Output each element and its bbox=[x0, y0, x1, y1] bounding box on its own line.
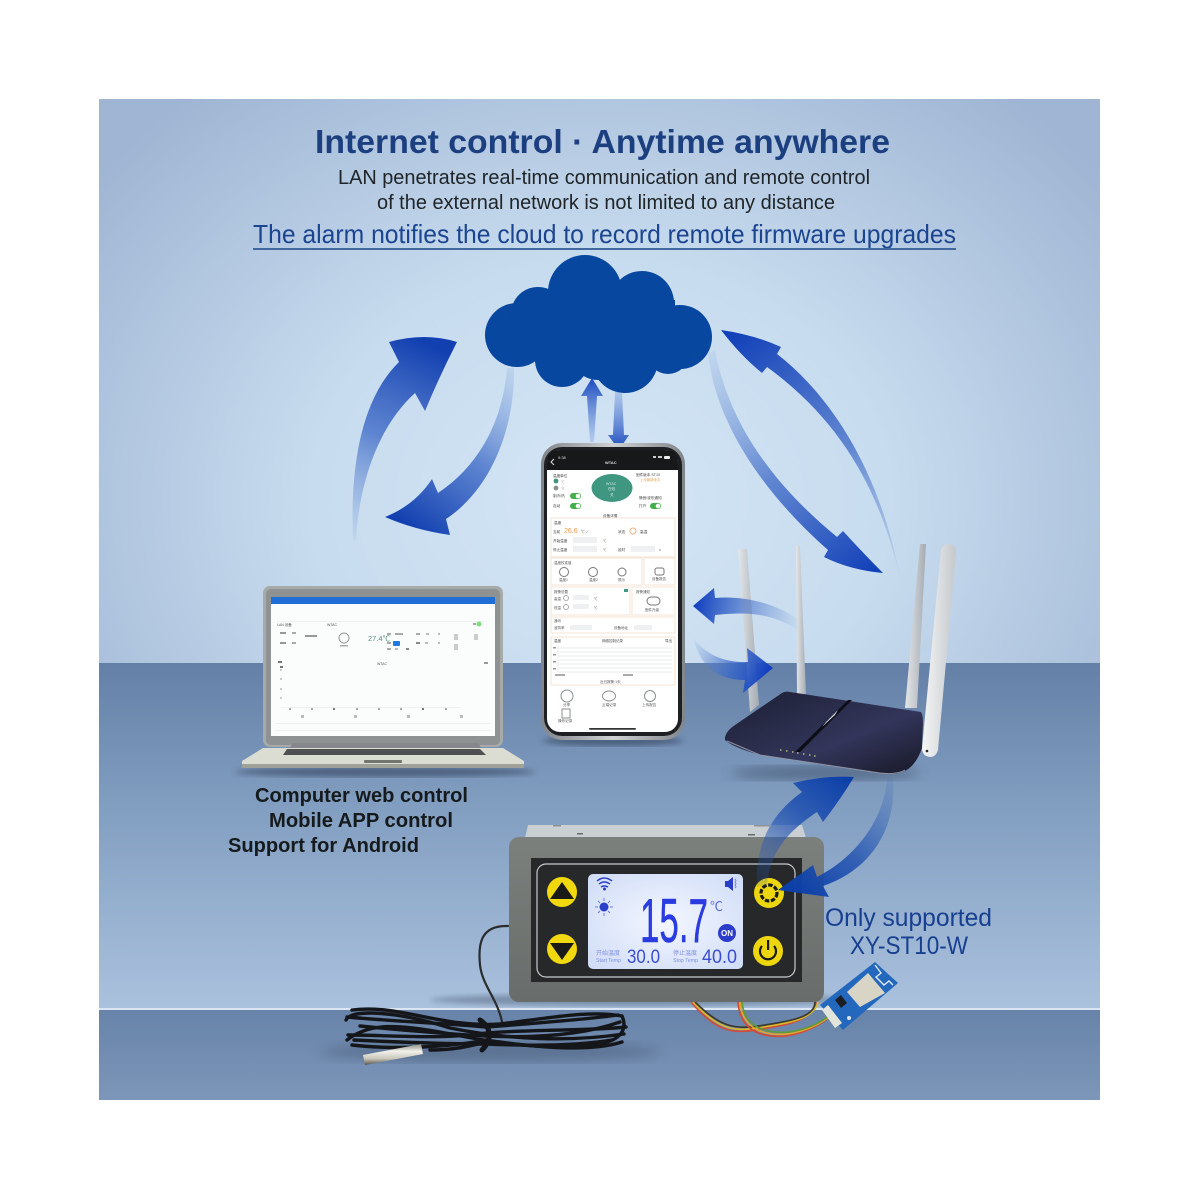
phone card details: ℃ bbox=[594, 597, 598, 601]
subtitle line 2: of the external network is not limited to any distance bbox=[377, 192, 835, 214]
router front edge and LEDs bbox=[727, 741, 905, 774]
arrow: cloud down to router bbox=[708, 350, 883, 573]
phone bottom actions bbox=[558, 690, 657, 730]
feature list text: Support for Android bbox=[228, 835, 419, 857]
feature list text: Mobile APP control bbox=[269, 810, 453, 832]
laptop screen content bbox=[275, 621, 491, 731]
phone temperature chart: 近日报警·1天 bbox=[600, 679, 621, 684]
phone temperature section: 温度 bbox=[554, 520, 562, 525]
phone temperature section: 开始温度 bbox=[553, 538, 568, 543]
phone temperature section bbox=[551, 518, 675, 557]
laptop screen content: LAN 设备 bbox=[277, 622, 292, 627]
phone device status: 在线 bbox=[608, 486, 616, 491]
phone device status: 自动 bbox=[553, 503, 561, 508]
phone temperature section: ℃ ✓ bbox=[581, 530, 589, 534]
icon: cloud bbox=[485, 255, 712, 393]
model note: XY-ST10-W bbox=[850, 932, 968, 960]
phone device status: 打开 bbox=[639, 503, 647, 508]
phone temperature chart: 导出 bbox=[665, 638, 672, 643]
phone temperature chart: 温度 bbox=[554, 638, 562, 643]
phone temperature section: ℃ bbox=[603, 548, 607, 552]
phone card details: 报警通知 bbox=[636, 589, 650, 594]
stop temp bbox=[673, 947, 737, 968]
phone device status: 静音/波形通知 bbox=[639, 495, 662, 500]
laptop base and keyboard bbox=[242, 743, 524, 768]
model note bbox=[825, 904, 992, 960]
phone device status: ℉ bbox=[561, 487, 565, 491]
phone temperature section: s bbox=[659, 548, 661, 552]
phone card details: 低温 bbox=[554, 605, 562, 610]
arrow: phone to router bbox=[693, 637, 773, 693]
phone device status: 上传最新版本 bbox=[640, 477, 661, 482]
router bbox=[725, 544, 956, 774]
phone card details: 设备地址 bbox=[614, 625, 628, 630]
laptop screen content: WTAC bbox=[377, 662, 388, 666]
degree unit: ℃ bbox=[710, 899, 723, 914]
wifi module board bbox=[820, 962, 898, 1030]
phone card details bbox=[554, 560, 666, 630]
phone card details: 固件升级 bbox=[645, 607, 659, 612]
phone device status bbox=[553, 472, 662, 518]
controller back housing bbox=[525, 825, 806, 838]
phone status bar: WTAC bbox=[605, 460, 617, 465]
router front antenna bbox=[922, 544, 956, 757]
phone frame bbox=[541, 443, 685, 740]
phone temperature section: 高温 bbox=[640, 529, 648, 534]
phone temperature section: 停止温度 bbox=[553, 547, 568, 552]
title: Internet control · Anytime anywhere bbox=[315, 123, 890, 160]
phone device status: 设备详情 bbox=[603, 513, 618, 518]
controller face panel bbox=[531, 858, 802, 982]
arrow: up to cloud from laptop bbox=[353, 337, 457, 540]
phone device status: 固件版本 ST10 bbox=[636, 472, 660, 477]
router center seam bbox=[795, 700, 852, 752]
phone temperature section: ℃ bbox=[603, 539, 607, 543]
laptop screen header bbox=[271, 597, 495, 604]
phone device status: 制冷/热 bbox=[553, 493, 565, 498]
start temp bbox=[596, 947, 660, 968]
temperature reading: 15.7 bbox=[640, 887, 708, 956]
phone device status: 关 bbox=[610, 492, 614, 497]
underlined feature line: The alarm notifies the cloud to record remote firmware upgrades bbox=[253, 219, 956, 249]
smartphone bbox=[541, 443, 685, 740]
phone temperature chart: 网络控制记录 bbox=[602, 638, 623, 643]
stop temp: Stop Temp bbox=[673, 958, 698, 964]
phone card details: 高温 bbox=[554, 596, 562, 601]
start temp: Start Temp bbox=[596, 958, 621, 964]
feature list text bbox=[228, 785, 468, 857]
ON badge: ON bbox=[721, 929, 733, 938]
temperature controller device bbox=[509, 825, 824, 1002]
temperature probe tip bbox=[363, 1044, 423, 1065]
cable coil bbox=[346, 1009, 626, 1050]
arrow: phone up to cloud bbox=[581, 378, 603, 442]
phone temperature section: 延时 bbox=[618, 547, 626, 552]
laptop bbox=[242, 586, 524, 768]
ON badge bbox=[718, 924, 736, 942]
feature list text: Computer web control bbox=[255, 785, 468, 807]
arrow: router to phone bbox=[693, 588, 798, 630]
module connector bbox=[822, 1005, 842, 1028]
icon: speaker bbox=[725, 877, 736, 891]
phone card details: 温度2 bbox=[589, 577, 598, 582]
phone bottom actions: 分享 bbox=[563, 702, 571, 707]
stop temp: 停止温度 bbox=[673, 949, 697, 957]
stop temp: 40.0 bbox=[702, 947, 737, 968]
background scene bbox=[99, 99, 1100, 1100]
button settings gear bbox=[754, 878, 784, 908]
phone card details: 设备报告 bbox=[652, 576, 666, 581]
model note: Only supported bbox=[825, 904, 992, 932]
phone device status: WTAC bbox=[606, 482, 617, 486]
phone card details: 温度1 bbox=[559, 577, 568, 582]
arrow: router up to cloud bbox=[721, 330, 900, 578]
phone temperature section: 26.6 bbox=[564, 528, 578, 535]
phone temperature section: 当前 bbox=[553, 529, 561, 534]
icon: wifi bbox=[597, 878, 612, 890]
laptop screen content: 27.4℃ bbox=[368, 634, 391, 643]
laptop lid bbox=[263, 586, 503, 747]
phone bottom actions: 云端记录 bbox=[602, 702, 617, 707]
router antennas rear bbox=[738, 549, 759, 712]
subtitle line 1: LAN penetrates real-time communication and remote control bbox=[338, 167, 870, 189]
phone temperature chart bbox=[551, 637, 675, 685]
phone card details: 温度校准值 bbox=[554, 560, 572, 565]
phone card details: 通讯 bbox=[554, 618, 562, 623]
start temp: 30.0 bbox=[627, 947, 660, 968]
phone card details: 波特率 bbox=[554, 625, 565, 630]
phone status bar: 9:38 bbox=[558, 455, 567, 460]
arrow: down from cloud to laptop bbox=[385, 368, 514, 535]
phone card details: 报警设置 bbox=[554, 589, 568, 594]
module shield bbox=[847, 973, 885, 1007]
phone card details: 提示 bbox=[618, 577, 626, 582]
button up bbox=[547, 877, 577, 907]
phone alarm and settings cards bbox=[551, 558, 675, 633]
phone status bar bbox=[547, 450, 678, 470]
button down bbox=[547, 934, 577, 964]
phone card details: ℃ bbox=[594, 606, 598, 610]
module antenna trace bbox=[875, 965, 893, 985]
temperature probe cable bbox=[346, 926, 626, 1050]
router body bbox=[725, 692, 923, 774]
LCD display bbox=[588, 874, 743, 969]
button power bbox=[753, 936, 783, 966]
controller body bbox=[509, 837, 824, 1002]
phone device status: 温度单位 bbox=[553, 473, 568, 478]
start temp: 开始温度 bbox=[596, 949, 620, 957]
laptop screen content: WTAC bbox=[327, 623, 338, 627]
phone bottom actions: 上传报告 bbox=[642, 702, 657, 707]
colored wires bbox=[691, 1002, 830, 1036]
arrow: device to router bbox=[757, 777, 854, 887]
arrow: router to device bbox=[778, 778, 893, 897]
icon: sun bbox=[595, 898, 613, 916]
phone bottom actions: 操作记录 bbox=[558, 718, 573, 723]
heading text block bbox=[253, 123, 956, 250]
phone device status: ℃ bbox=[561, 480, 565, 484]
phone temperature section: 状态 bbox=[618, 529, 626, 534]
arrow: cloud down to phone bbox=[608, 392, 629, 450]
